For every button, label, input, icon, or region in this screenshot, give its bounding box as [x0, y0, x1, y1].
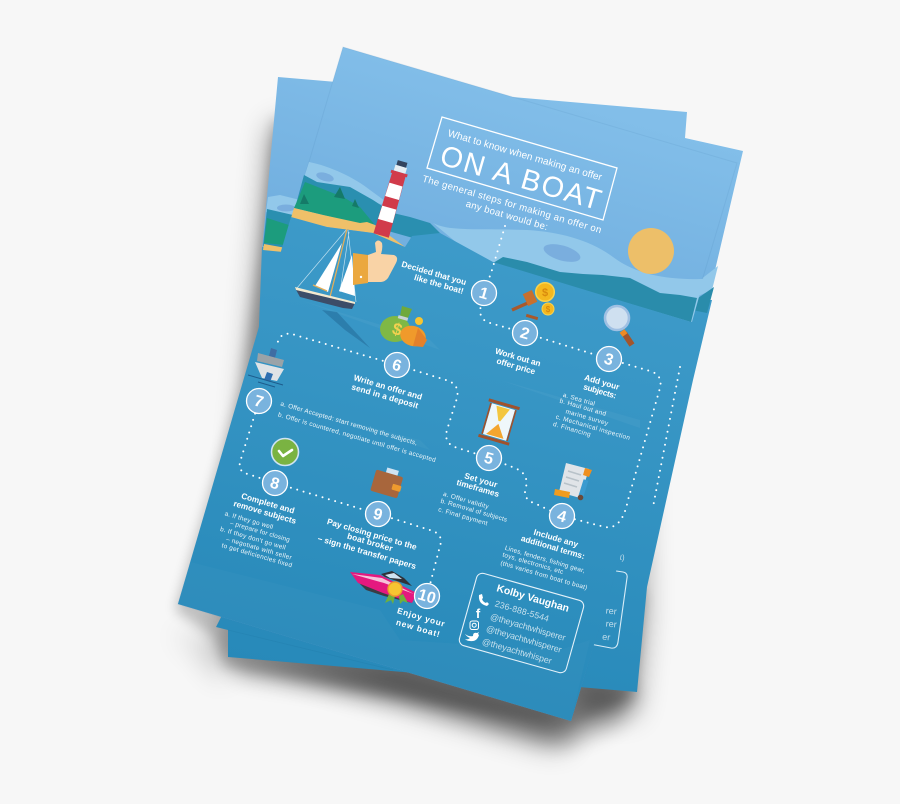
step 4 badge: 4 — [555, 508, 568, 526]
step 4 list: Lines, fenders, fishing gear, — [504, 545, 586, 575]
step 9 text: boat broker — [346, 531, 395, 554]
back flyer contact text: rer — [605, 619, 617, 629]
step 3 list — [552, 392, 631, 442]
step 10 badge: 10 — [416, 586, 438, 608]
contact twitter: @theyachtwhisper — [481, 636, 553, 666]
step 8 list: b. If they don't go well — [219, 526, 286, 552]
step 7 badge: 7 — [252, 393, 265, 411]
sailboat — [295, 229, 370, 348]
step 4 list: toys, electronics, etc — [502, 552, 565, 576]
step 9 text: – sign the transfer papers — [317, 533, 418, 571]
contact card frame — [458, 572, 585, 674]
cloud on the left hill — [315, 171, 335, 183]
icon: instagram — [470, 621, 478, 630]
icon: scroll and pencil — [554, 463, 592, 500]
step 8 list: – negotiate with seller — [225, 536, 293, 562]
step 1 badge: 1 — [477, 285, 490, 303]
icon: gavel and coins: $ — [546, 305, 551, 314]
icon: phone — [479, 594, 489, 606]
icon: wallet — [370, 465, 406, 499]
step 2 — [494, 320, 542, 376]
main sail — [315, 243, 342, 292]
step 10 text — [395, 605, 447, 639]
step 3 badge: 3 — [602, 351, 615, 369]
rigging — [297, 229, 356, 302]
title main: ON A BOAT — [436, 140, 605, 217]
hull — [295, 288, 355, 309]
sea — [178, 217, 691, 721]
step 3 list: d. Financing — [552, 421, 592, 439]
hull trim — [295, 287, 355, 304]
hill on the left — [300, 162, 392, 206]
contact instagram: @theyachtwhisperer — [485, 623, 563, 655]
subtitle: any boat would be: — [464, 199, 549, 233]
back flyer left island — [263, 209, 293, 248]
step 4 — [500, 504, 588, 592]
step 3 heading — [582, 372, 621, 401]
title frame — [427, 117, 617, 220]
step 8 list: a. If they go well — [224, 510, 274, 531]
step 7 text: b. Offer is countered, negotiate until offer is accepted — [277, 412, 437, 464]
step 7 text: a. Offer Accepted: start removing the subjects, — [280, 401, 418, 447]
step 9 — [317, 502, 418, 571]
back flyer left sand — [263, 244, 286, 252]
hill on the right — [433, 223, 704, 322]
step 9 text — [317, 516, 418, 571]
step 7 — [246, 388, 437, 464]
back flyer contact text: t) — [619, 553, 625, 562]
back flyer fold line — [228, 630, 393, 670]
cloud on the hill — [542, 241, 582, 265]
step 10 text: new boat! — [395, 617, 441, 639]
back flyer dotted route — [653, 367, 680, 507]
step 8 list: – prepare for closing — [229, 520, 291, 544]
step 4 heading: Include any — [533, 527, 580, 549]
step 6 — [350, 352, 423, 410]
dotted route — [240, 226, 661, 596]
step 2 text: offer price — [495, 356, 537, 376]
icon: gavel and coins: $ — [542, 287, 548, 299]
back flyer sea — [216, 247, 712, 692]
lighthouse — [373, 159, 411, 238]
step 4 list — [500, 545, 588, 592]
front flyer sky — [178, 47, 737, 721]
title — [436, 128, 605, 217]
icon: facebook: f — [476, 606, 481, 621]
step 1 text: like the boat! — [413, 272, 465, 296]
step 6 badge: 6 — [390, 357, 403, 375]
sand beach — [291, 208, 405, 247]
title kicker: What to know when making an offer — [446, 128, 604, 184]
step 2 text: Work out an — [494, 346, 542, 368]
step 2 badge: 2 — [518, 325, 531, 343]
icon: magnifying glass — [605, 306, 632, 345]
back flyer contact text: er — [602, 632, 611, 642]
icon: money bag and piggy bank: $ — [390, 319, 405, 340]
step 4 heading: additional terms: — [520, 533, 586, 561]
contact facebook: @theyachtwhisperer — [489, 611, 567, 643]
front flyer — [178, 47, 737, 721]
contact name: Kolby Vaughan — [495, 583, 570, 615]
subtitle: The general steps for making an offer on — [421, 174, 603, 236]
step 3 heading: Add your — [583, 372, 621, 392]
step 6 text: Write an offer and — [353, 372, 423, 402]
back flyer contact box — [590, 568, 627, 648]
back flyer contact text — [602, 553, 625, 642]
step 10 text: Enjoy your — [396, 605, 447, 629]
step 8 list: to get deficiencies fixed — [221, 542, 293, 569]
step 3 list: a. Sea trial — [562, 392, 596, 408]
back flyer left forest — [264, 218, 292, 245]
contact card — [458, 572, 585, 674]
step 10 — [395, 584, 447, 639]
far land on the left — [295, 175, 447, 240]
boat reflection — [322, 310, 370, 348]
step 1 text: Decided that you — [400, 259, 468, 287]
mast and boom — [313, 229, 347, 297]
icon: money bag and piggy bank — [380, 306, 428, 349]
step 5 badge: 5 — [482, 450, 495, 468]
sun — [628, 228, 674, 274]
icon: hourglass — [478, 398, 520, 446]
step 3 list: marine survey — [565, 408, 610, 427]
step 9 text: Pay closing price to the — [326, 516, 418, 552]
sea shimmer bands — [178, 300, 640, 721]
step 5 list — [437, 491, 508, 527]
icon: twitter — [465, 632, 479, 641]
far land on the right — [493, 257, 697, 322]
icon: gavel and coins — [512, 283, 554, 320]
step 3 heading: subjects: — [582, 381, 618, 401]
back flyers — [216, 77, 743, 692]
icon: thumbs up — [353, 240, 397, 285]
step 8 heading: Complete and — [240, 491, 296, 515]
back flyer sky — [262, 77, 743, 300]
step 7 badge — [246, 388, 272, 414]
step 3 — [552, 346, 631, 442]
step 8 heading: remove subjects — [232, 498, 298, 526]
step 5 list: a. Offer validity — [442, 491, 490, 511]
contact phone: 236-888-5544 — [494, 598, 550, 624]
step 8 — [219, 470, 298, 569]
step 5 list: c. Final payment — [437, 506, 488, 527]
step 3 list: c. Mechanical inspection — [555, 414, 631, 442]
forest on the island — [294, 182, 374, 224]
step 5 — [437, 446, 508, 527]
step 9 badge: 9 — [371, 506, 384, 524]
step 1 — [400, 259, 496, 306]
back flyer left cloud — [277, 204, 295, 212]
step 6 text: send in a deposit — [350, 382, 420, 410]
icon: green check mark — [272, 438, 298, 466]
soft shadow under the flyers — [172, 116, 644, 748]
icon: speedboat with medal — [350, 571, 417, 604]
back flyer right land — [692, 287, 714, 313]
back flyer left hill — [266, 195, 300, 222]
step 5 heading: Set your — [463, 470, 499, 490]
step 8 list — [219, 510, 293, 569]
step 5 list: b. Removal of subjects — [440, 498, 508, 524]
step 4 list: (this varies from boat to boat) — [500, 560, 588, 592]
back flyer contact text: rer — [605, 606, 617, 616]
back flyer right hill — [698, 266, 718, 296]
step 3 list: b. Haul out and — [559, 398, 607, 418]
step 8 badge: 8 — [268, 475, 281, 493]
step 5 heading: timeframes — [455, 477, 501, 499]
fore sail — [339, 255, 355, 296]
icon: ship — [248, 348, 284, 387]
